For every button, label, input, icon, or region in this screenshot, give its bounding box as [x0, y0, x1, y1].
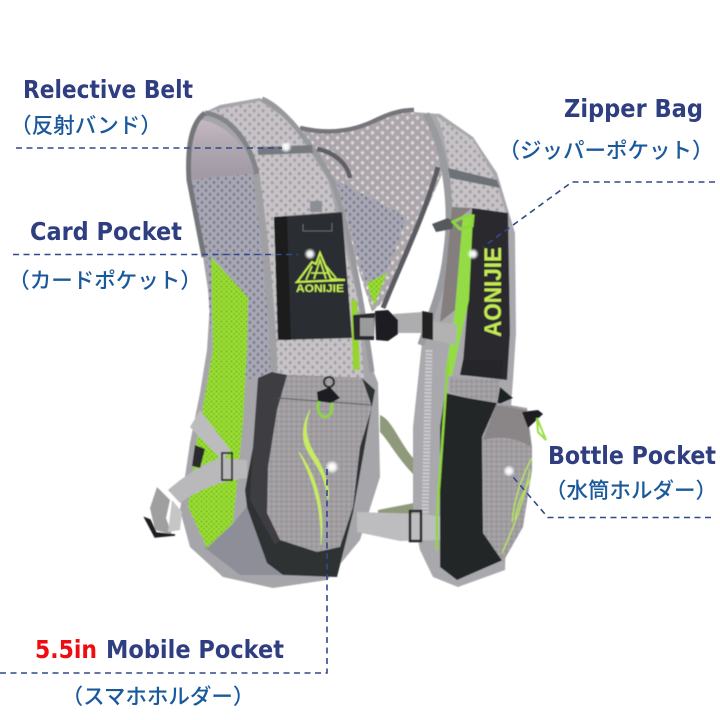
- zipper pull: [432, 216, 473, 232]
- brand text vertical: AONIJIE: [480, 247, 507, 337]
- lower back mesh: [205, 505, 283, 575]
- left side straps and buckle: [145, 410, 247, 537]
- inner blue mesh: [192, 173, 273, 380]
- grab handle: [317, 149, 350, 178]
- mobile pocket: [245, 372, 375, 577]
- reflective strip right: [448, 168, 500, 188]
- label: mobile pocket: Mobile Pocket: [106, 635, 284, 664]
- label: reflective belt: （反射バンド）: [10, 114, 162, 138]
- panel bindings: [256, 174, 274, 372]
- label: mobile pocket: 5.5in: [35, 635, 97, 664]
- left vest panel: [180, 98, 380, 588]
- vest illustration: [145, 98, 546, 588]
- green stripes: [502, 458, 532, 553]
- label: zipper bag: [483, 94, 715, 247]
- light glare spots: [280, 141, 515, 477]
- aonijie logo: AONIJIE: [296, 283, 344, 295]
- label: mobile pocket: [0, 467, 327, 709]
- green trim: [351, 300, 360, 370]
- toggle: [317, 377, 340, 417]
- pocket tag: [310, 201, 322, 212]
- pocket front fabric: [267, 375, 372, 552]
- toggle: [522, 410, 546, 440]
- chest strap and buckle: [353, 310, 457, 345]
- label: bottle pocket: （水筒ホルダー）: [545, 479, 717, 503]
- green stripes: [303, 410, 329, 500]
- right vest panel: [412, 112, 516, 587]
- label: card pocket: [8, 217, 298, 293]
- label: zipper bag: （ジッパーポケット）: [498, 139, 714, 163]
- label: reflective belt: [10, 75, 282, 148]
- back mesh panel: [296, 110, 446, 312]
- green mesh side panel: [188, 257, 248, 548]
- card pocket: [274, 212, 352, 340]
- label: card pocket: Card Pocket: [30, 217, 182, 246]
- green side mesh right: [367, 273, 387, 306]
- label: zipper bag: Zipper Bag: [564, 94, 703, 123]
- label: bottle pocket: [513, 441, 717, 518]
- olive straps behind vest: [378, 415, 414, 520]
- inner armhole mesh: [191, 120, 256, 180]
- lower chest strap: [357, 511, 443, 541]
- bottle pocket: [437, 360, 546, 580]
- zipper pocket: [440, 207, 510, 380]
- shoulder mesh: [210, 101, 364, 378]
- green zipper: [437, 360, 448, 550]
- label: mobile pocket: （スマホホルダー）: [62, 685, 254, 709]
- reflective strip left: [258, 145, 313, 155]
- label: reflective belt: Relective Belt: [23, 75, 193, 104]
- label: card pocket: （カードポケット）: [8, 269, 202, 293]
- bottle pouch fabric: [482, 403, 532, 562]
- centre back blue mesh: [336, 180, 407, 285]
